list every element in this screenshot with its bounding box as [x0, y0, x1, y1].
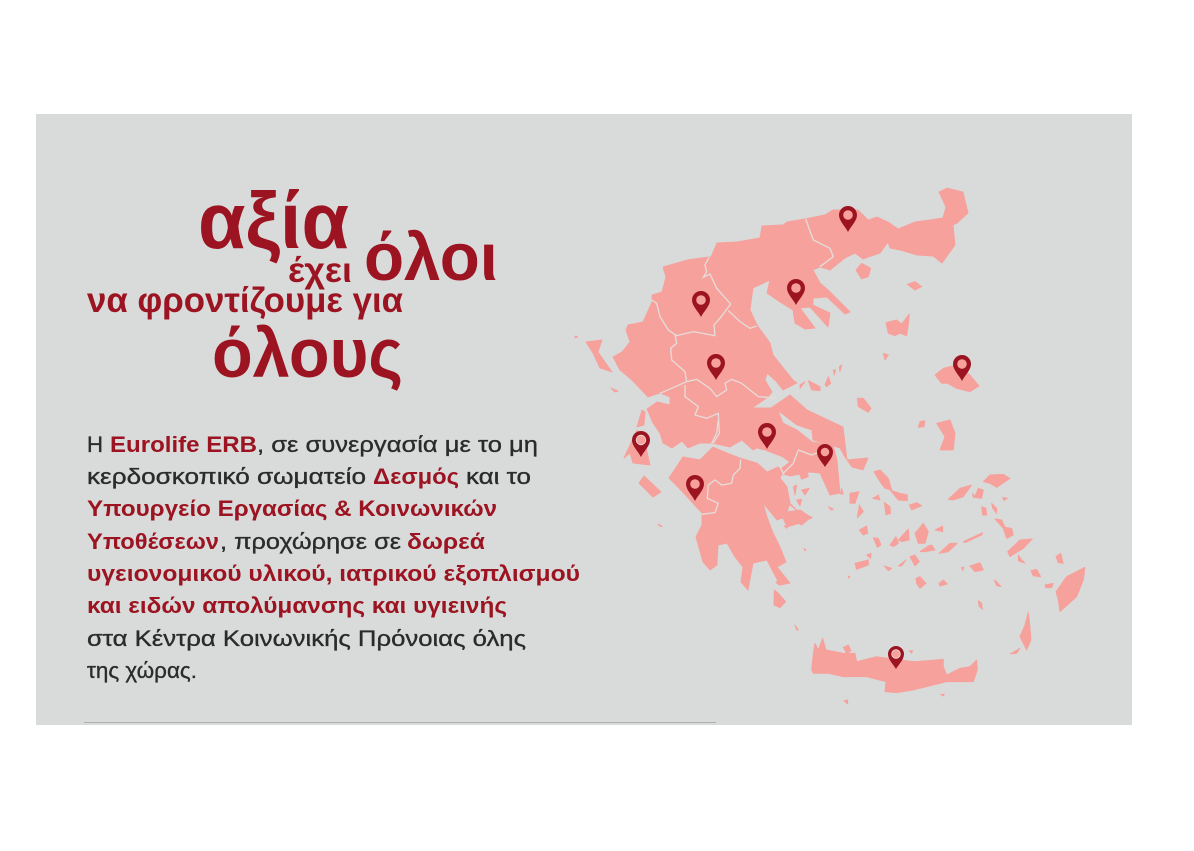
text block: description paragraph: , σε συνεργασία με το μη	[257, 432, 538, 457]
pin: Central Greece	[758, 423, 776, 449]
text block: description paragraph: στα Κέντρα Κοινωνικής Πρόνοιας όλης	[87, 626, 526, 651]
pins: map markers	[632, 206, 971, 669]
title: headline words: να φροντίζουμε για	[87, 281, 403, 320]
title: headline words: αξία	[198, 176, 349, 265]
map: Ionian islands	[575, 336, 661, 497]
text block: description paragraph: Η	[87, 432, 103, 457]
pin: Western Macedonia	[692, 291, 710, 317]
map of Greece	[575, 188, 1085, 704]
text block: description paragraph: και το	[466, 464, 531, 489]
pin: Thessaly	[707, 354, 725, 380]
pin: Attica	[817, 444, 833, 467]
text block: description paragraph: , προχώρησε σε	[220, 529, 401, 554]
title: headline words	[87, 176, 498, 392]
map: mainland Greece	[613, 188, 968, 495]
title: headline words: όλοι	[364, 220, 498, 295]
text block: description paragraph: της χώρας.	[87, 658, 197, 683]
text block: description paragraph: Υποθέσεων	[87, 529, 219, 554]
text block: description paragraph: και ειδών απολύμανσης και υγιεινής	[87, 593, 507, 618]
pin: Lesvos	[953, 355, 971, 381]
map: Crete	[812, 638, 977, 704]
text block: description paragraph: Υπουργείο Εργασίας & Κοινωνικών	[87, 496, 497, 521]
pin: Central Macedonia	[787, 279, 805, 305]
text block: description paragraph: δωρεά	[407, 529, 485, 554]
pin: Eastern Macedonia and Thrace	[839, 206, 857, 232]
pin: Western Greece	[686, 475, 704, 501]
map: region borders	[652, 219, 833, 514]
text block: description paragraph: Eurolife ERB	[110, 432, 257, 457]
map: Peloponnese	[669, 447, 812, 590]
text block: description paragraph: Δεσμός	[373, 464, 459, 489]
pin: Kefalonia	[632, 431, 650, 457]
title: headline words: όλους	[212, 314, 403, 392]
map: Euboea	[768, 395, 868, 470]
text block: description paragraph	[87, 432, 580, 683]
map: Cyclades and Dodecanese	[804, 470, 1085, 654]
map: Saronic and southern islands	[658, 470, 843, 630]
text block: description paragraph: κερδοσκοπικό σωματείο	[87, 464, 366, 489]
title: headline words: έχει	[288, 251, 352, 290]
panel: grey background	[36, 114, 1132, 725]
text block: description paragraph: υγειονομικού υλικού, ιατρικού εξοπλισμού	[87, 561, 580, 586]
map: North Aegean islands	[800, 263, 979, 450]
divider line under text	[84, 722, 716, 723]
pin: Crete	[888, 646, 904, 669]
